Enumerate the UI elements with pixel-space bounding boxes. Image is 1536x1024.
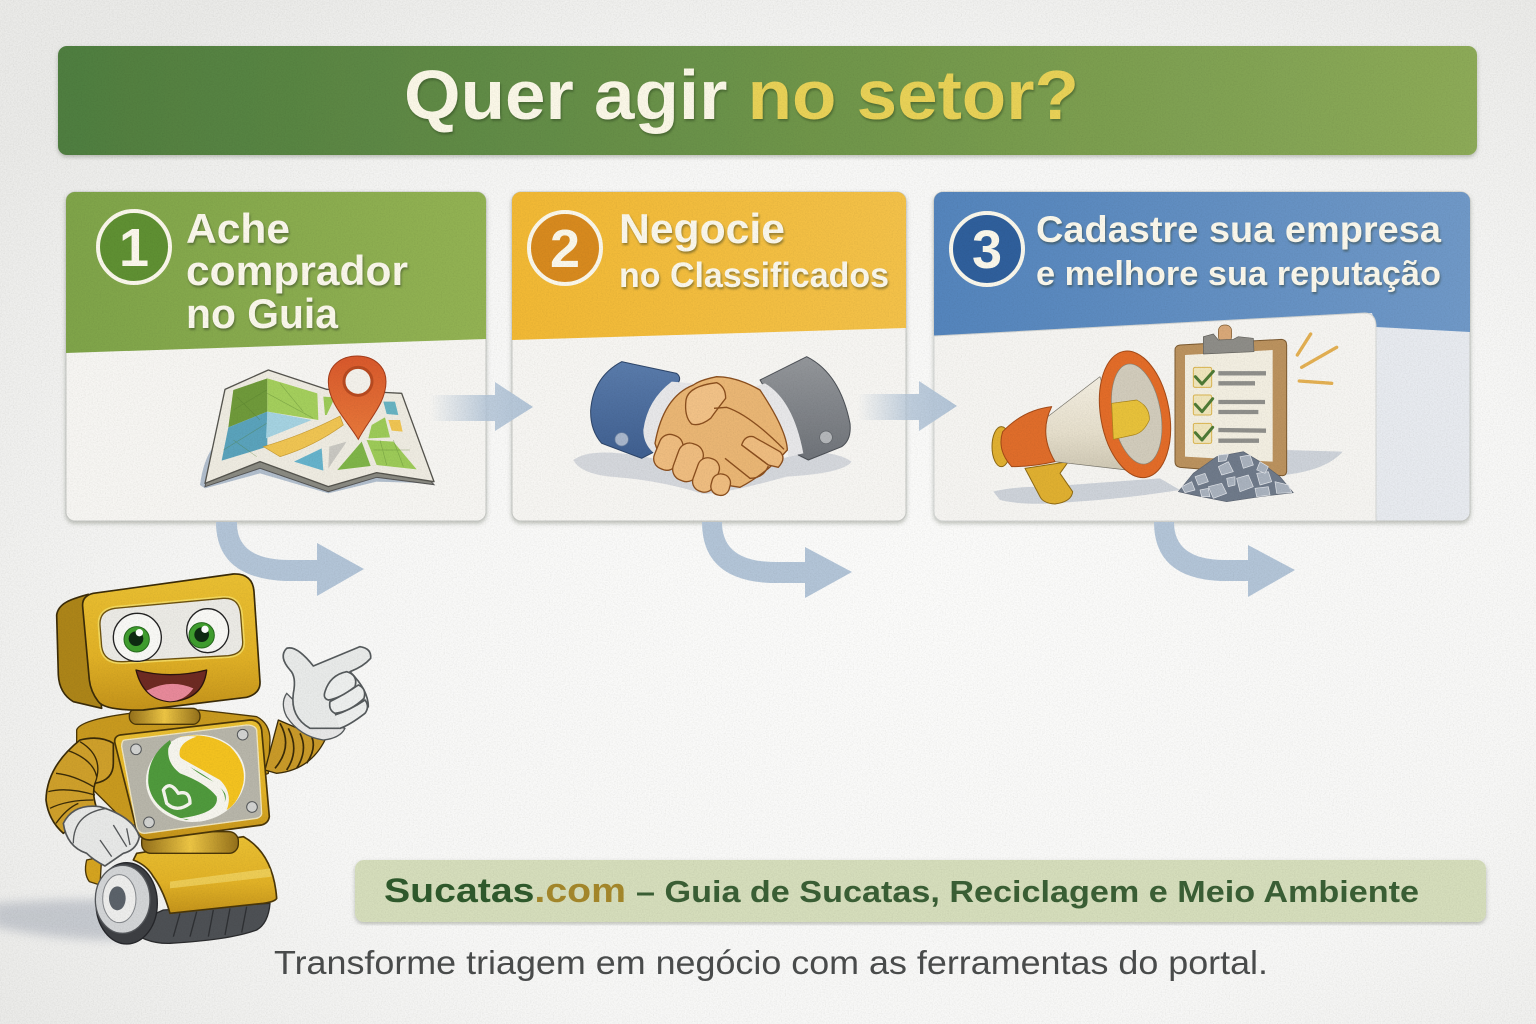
step 1 number badge: [98, 211, 170, 283]
step 2 number badge: 2: [550, 219, 580, 279]
step 1 heading: Ache: [186, 205, 290, 252]
step 3 heading: e melhore sua reputação: [1036, 255, 1441, 293]
step 3 inner white sheet: [934, 313, 1376, 521]
step 1 heading: comprador: [186, 247, 408, 294]
step 1 heading: [186, 205, 408, 337]
step 1 number badge: 1: [119, 218, 149, 278]
icon: megaphone, clipboard and scrap pile: [992, 325, 1343, 504]
panel: step 1: [66, 192, 486, 521]
step 2 heading: [619, 205, 889, 295]
arrow: card 1 to card 2: [430, 382, 533, 431]
arrow: bent arrow under card 1: [216, 522, 364, 596]
robot chest logo: [138, 726, 254, 831]
step 2 number badge: [529, 212, 601, 284]
step 3 heading: [1036, 209, 1441, 293]
robot mouth: [136, 670, 207, 702]
arrow: bent arrow under card 3: [1154, 522, 1295, 597]
footer tagline: – Guia de Sucatas, Reciclagem e Meio Ambiente: [636, 874, 1419, 909]
step 3 header: [934, 192, 1470, 336]
step 2 header: [512, 192, 906, 340]
robot left arm: [46, 738, 113, 833]
title banner: [58, 46, 1477, 155]
footer text: Sucatas .com: [384, 872, 626, 910]
step 3 number badge: [951, 213, 1023, 285]
robot eyes: [113, 609, 229, 661]
step 2 heading: Negocie: [619, 205, 785, 252]
step 2 heading: no Classificados: [619, 256, 889, 295]
step 1 header: [66, 192, 486, 353]
icon: folded map with pin: [200, 356, 434, 493]
robot mascot: [0, 574, 371, 944]
arrow: card 2 to card 3: [858, 381, 957, 431]
panel: step 2: [512, 192, 906, 521]
arrow: bent arrow under card 2: [702, 522, 852, 598]
title text: Quer agir no setor?: [404, 56, 1079, 134]
step 1 heading: no Guia: [186, 290, 339, 337]
panel: step 3: [934, 192, 1470, 521]
step 3 heading: Cadastre sua empresa: [1036, 209, 1441, 250]
step 3 number badge: 3: [972, 220, 1002, 280]
footer banner: [355, 860, 1486, 922]
closing sentence: Transforme triagem em negócio com as ferramentas do portal.: [274, 944, 1268, 981]
icon: handshake: [573, 357, 852, 497]
